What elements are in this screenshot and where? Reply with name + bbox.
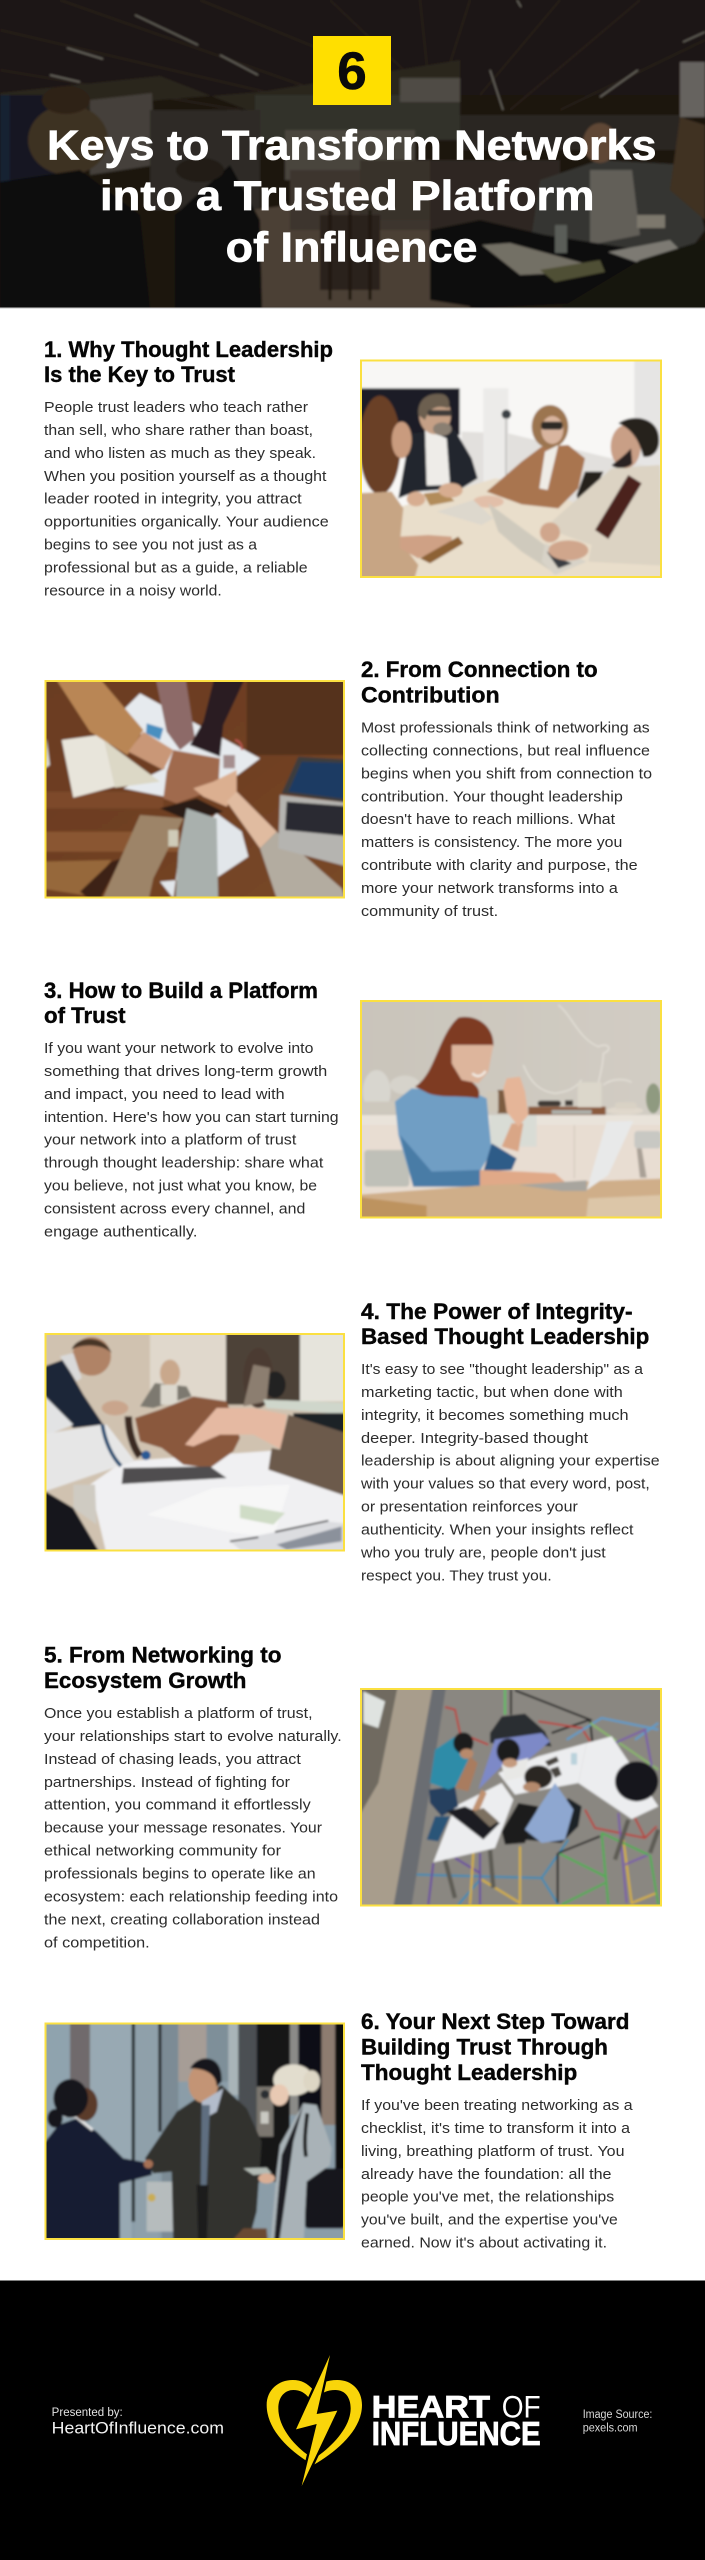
body 3: intention. Here's how you can start turning — [44, 1110, 339, 1126]
body 5: of competition. — [44, 1935, 150, 1951]
footer background — [0, 2280, 705, 2560]
photo 1 frame — [361, 360, 661, 577]
hero bottom edge — [0, 308, 705, 309]
body 5: Once you establish a platform of trust, — [44, 1706, 312, 1722]
body 6 — [361, 2098, 633, 2252]
body 5: ethical networking community for — [44, 1844, 281, 1860]
body 4: It's easy to see "thought leadership" as a — [361, 1362, 643, 1378]
photo 6 frame — [46, 2024, 344, 2239]
section 6 text — [361, 2009, 633, 2252]
heading 5: 5. From Networking to — [44, 1642, 282, 1668]
body 1: than sell, who share rather than boast, — [44, 423, 313, 439]
body 4: or presentation reinforces your — [361, 1500, 578, 1516]
heading 6: Thought Leadership — [361, 2060, 577, 2085]
title — [47, 121, 656, 271]
body 2: community of trust. — [361, 904, 498, 920]
photo 1: meeting around a table — [360, 360, 662, 578]
number badge — [313, 36, 391, 105]
body 2: begins when you shift from connection to — [361, 766, 652, 782]
body 3: and impact, you need to lead with — [44, 1087, 285, 1103]
body 1: resource in a noisy world. — [44, 583, 222, 599]
icon: heart and lightning bolt — [267, 2355, 362, 2486]
photo 5: overhead view of three men at tables — [360, 1688, 662, 1906]
hero background photo: exhibition hall — [0, 0, 705, 320]
title: into a Trusted Platform — [100, 172, 594, 219]
body 5: your relationships start to evolve naturally. — [44, 1729, 342, 1745]
presented by — [52, 2407, 224, 2438]
body 4: authenticity. When your insights reflect — [361, 1522, 634, 1538]
photo 2: hands stacked together — [44, 680, 345, 898]
heading 3 — [44, 978, 318, 1028]
body 1: begins to see you not just as a — [44, 538, 257, 554]
heading 5 — [44, 1642, 282, 1693]
heading 6: 6. Your Next Step Toward — [361, 2009, 630, 2034]
image source — [583, 2409, 652, 2434]
body 1: leader rooted in integrity, you attract — [44, 492, 302, 508]
body 6: checklist, it's time to transform it into a — [361, 2121, 630, 2137]
section 3 text — [44, 978, 339, 1240]
body 6: you've built, and the expertise you've — [361, 2213, 618, 2229]
body 1: When you position yourself as a thought — [44, 469, 326, 485]
heading 5: Ecosystem Growth — [44, 1668, 246, 1693]
body 2: Most professionals think of networking as — [361, 720, 650, 736]
heading 4: Based Thought Leadership — [361, 1324, 649, 1349]
section 4 text — [360, 1299, 660, 1584]
body 2 — [361, 720, 652, 920]
body 4: deeper. Integrity-based thought — [361, 1431, 588, 1447]
photo 2 frame — [46, 681, 344, 898]
heading 4 — [361, 1299, 649, 1349]
body 1: and who listen as much as they speak. — [44, 446, 316, 462]
body 1: professional but as a guide, a reliable — [44, 560, 308, 576]
heading 1 — [44, 337, 333, 387]
body 3: something that drives long-term growth — [44, 1064, 327, 1080]
photo 6: three people greeting on the street — [44, 2022, 345, 2240]
title: of Influence — [226, 224, 478, 271]
section 2 text — [361, 657, 652, 920]
body 5: because your message resonates. Your — [44, 1821, 322, 1837]
body 3: If you want your network to evolve into — [44, 1041, 313, 1057]
photo 5 frame — [361, 1689, 661, 1906]
body 5: attention, you command it effortlessly — [44, 1798, 312, 1814]
heading 3: of Trust — [44, 1003, 126, 1028]
photo 3: woman waving at laptop — [360, 1000, 662, 1218]
heading 1: Is the Key to Trust — [44, 362, 236, 387]
body 6: people you've met, the relationships — [361, 2190, 614, 2206]
body 6: earned. Now it's about activating it. — [361, 2236, 607, 2252]
body 2: doesn't have to reach millions. What — [361, 812, 615, 828]
body 5: professionals begins to operate like an — [44, 1866, 316, 1882]
body 4: marketing tactic, but when done with — [361, 1385, 623, 1401]
body 3: consistent across every channel, and — [44, 1202, 305, 1218]
body 3: engage authentically. — [44, 1224, 197, 1240]
body 3: through thought leadership: share what — [44, 1156, 323, 1172]
logo — [267, 2355, 541, 2486]
photo 4 frame — [46, 1334, 344, 1550]
body 1 — [44, 400, 329, 599]
body 6: already have the foundation: all the — [361, 2167, 612, 2183]
number badge: 6 — [337, 42, 367, 101]
body 4: respect you. They trust you. — [361, 1568, 552, 1584]
body 2: contribution. Your thought leadership — [361, 789, 623, 805]
body 2: collecting connections, but real influence — [361, 743, 650, 759]
heading 6: Building Trust Through — [361, 2034, 608, 2060]
body 6: If you've been treating networking as a — [361, 2098, 633, 2114]
footer — [0, 2280, 705, 2560]
heading 2: Contribution — [361, 682, 500, 708]
heading 1: 1. Why Thought Leadership — [44, 337, 333, 362]
wordmark — [372, 2389, 541, 2452]
title: Keys to Transform Networks — [47, 121, 656, 168]
heading 2: 2. From Connection to — [361, 657, 598, 682]
body 3: your network into a platform of trust — [44, 1133, 296, 1149]
presented by: Presented by: — [52, 2407, 123, 2419]
body 2: contribute with clarity and purpose, the — [361, 858, 638, 874]
body 6: living, breathing platform of trust. You — [361, 2144, 624, 2160]
body 5: ecosystem: each relationship feeding into — [44, 1889, 338, 1905]
presented by: HeartOfInfluence.com — [52, 2418, 224, 2438]
body 4: integrity, it becomes something much — [361, 1408, 629, 1424]
body 1: opportunities organically. Your audience — [44, 515, 329, 531]
image source: Image Source: — [583, 2409, 652, 2421]
body 4 — [360, 1362, 660, 1584]
body 1: People trust leaders who teach rather — [44, 400, 308, 416]
heading 2 — [361, 657, 598, 708]
image source: pexels.com — [583, 2422, 638, 2434]
body 5 — [44, 1706, 342, 1951]
photo 4: handshake over documents — [44, 1333, 345, 1552]
hero banner — [0, 0, 705, 320]
body 4: who you truly are, people don't just — [360, 1545, 606, 1561]
body 5: Instead of chasing leads, you attract — [44, 1752, 301, 1768]
body 2: matters is consistency. The more you — [361, 835, 622, 851]
heading 6 — [361, 2009, 630, 2085]
body 4: leadership is about aligning your expertise — [361, 1454, 660, 1470]
body 3 — [44, 1041, 339, 1240]
body 2: more your network transforms into a — [361, 881, 618, 897]
section 1 text — [44, 337, 333, 599]
body 5: partnerships. Instead of fighting for — [44, 1775, 290, 1791]
body 3: you believe, not just what you know, be — [44, 1179, 317, 1195]
photo 3 frame — [361, 1001, 661, 1218]
wordmark: OF — [502, 2389, 541, 2425]
body 5: the next, creating collaboration instead — [44, 1912, 320, 1928]
heading 3: 3. How to Build a Platform — [44, 978, 318, 1003]
wordmark: INFLUENCE — [372, 2415, 541, 2452]
section 5 text — [44, 1642, 342, 1951]
body 4: with your values so that every word, post, — [360, 1477, 650, 1493]
wordmark: HEART — [372, 2389, 490, 2425]
heading 4: 4. The Power of Integrity- — [361, 1299, 633, 1324]
